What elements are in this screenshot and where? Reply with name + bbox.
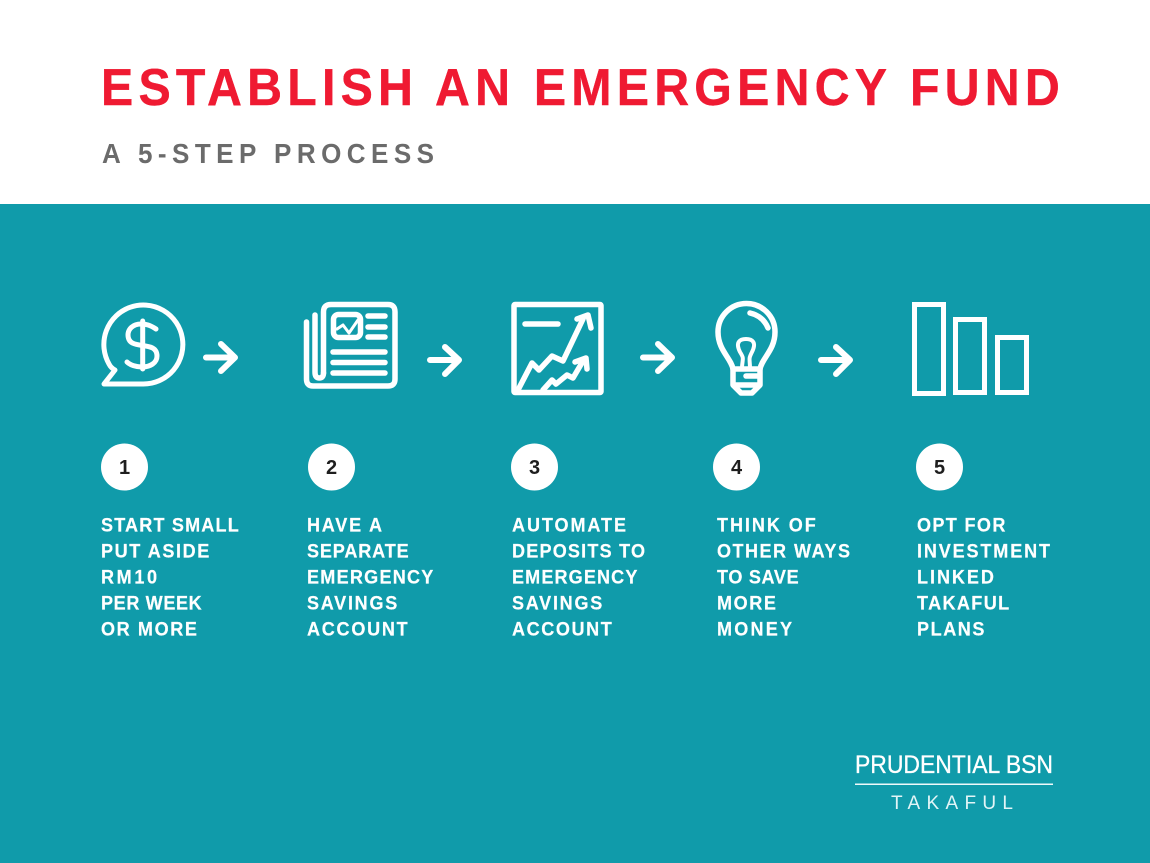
subtitle: A 5-STEP PROCESS [102,138,434,169]
step 2: ACCOUNT [307,618,408,640]
step 1: OR MORE [101,618,197,640]
step 2 [307,444,434,640]
step 5 [916,444,1051,640]
teal background panel [0,204,1150,863]
step 1: 1 [119,457,130,479]
step 5: INVESTMENT [917,540,1051,562]
arrow 4 [821,347,850,374]
step 4 [713,444,850,640]
arrow 2 [430,347,459,374]
step 3: AUTOMATE [512,514,626,536]
arrow 1 [206,344,235,371]
step 2: HAVE A [307,514,382,536]
logo: Prudential BSN Takaful: PRUDENTIAL BSN [855,751,1053,779]
step 2: 2 [326,457,337,479]
step 4: MORE [717,592,776,614]
icon: newspaper [306,304,395,386]
step 1 [101,444,239,640]
step 3: ACCOUNT [512,618,612,640]
step 2: SEPARATE [307,540,409,562]
step 1: RM10 [101,566,157,588]
arrow 3 [643,344,672,371]
step 4: 4 [731,457,743,479]
step 1: PER WEEK [101,592,202,614]
step 4: THINK OF [717,514,816,536]
step 3: DEPOSITS TO [512,540,645,562]
icon: light bulb [718,304,775,393]
step 4: OTHER WAYS [717,540,850,562]
step 3: EMERGENCY [512,566,638,588]
step 4: MONEY [717,618,793,640]
title: ESTABLISH AN EMERGENCY FUND [101,58,1060,116]
step 1: PUT ASIDE [101,540,209,562]
step 5: LINKED [917,566,994,588]
step 1: START SMALL [101,514,239,536]
logo: Prudential BSN Takaful [855,751,1053,814]
icon: growth chart [514,304,601,392]
step 5: TAKAFUL [917,592,1009,614]
icon: bar columns [914,304,1026,394]
step 3: 3 [529,457,540,479]
logo: Prudential BSN Takaful: TAKAFUL [891,793,1013,814]
step 2: EMERGENCY [307,566,434,588]
step 2: SAVINGS [307,592,397,614]
step 5: PLANS [917,618,984,640]
step 3 [511,444,645,640]
icon: speech bubble with dollar [104,305,183,384]
step 3: SAVINGS [512,592,602,614]
step 4: TO SAVE [717,566,799,588]
step 5: 5 [934,457,945,479]
step 5: OPT FOR [917,514,1005,536]
